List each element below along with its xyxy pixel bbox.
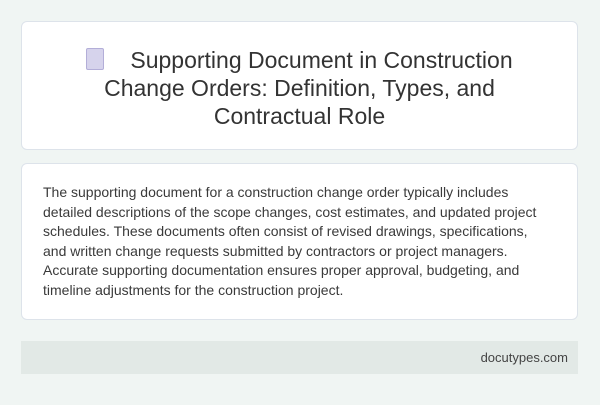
panel: description card — [21, 163, 578, 320]
footer — [21, 341, 578, 374]
text block: The supporting document for a construction change order typically includes detailed descriptions of the scope changes, cost estimates, and updated project schedules. These documents often consist of revised drawings, specifications, and written change requests submitted by contractors or project managers. Accurate supporting documentation ensures proper approval, budgeting, and timeline adjustments for the construction project. — [43, 184, 536, 298]
panel: title card — [21, 21, 578, 150]
footer text: docutypes.com — [481, 350, 568, 365]
title: Supporting Document in Construction Change Orders: Definition, Types, and Contractual Role — [104, 47, 513, 129]
icon: document — [86, 48, 104, 70]
